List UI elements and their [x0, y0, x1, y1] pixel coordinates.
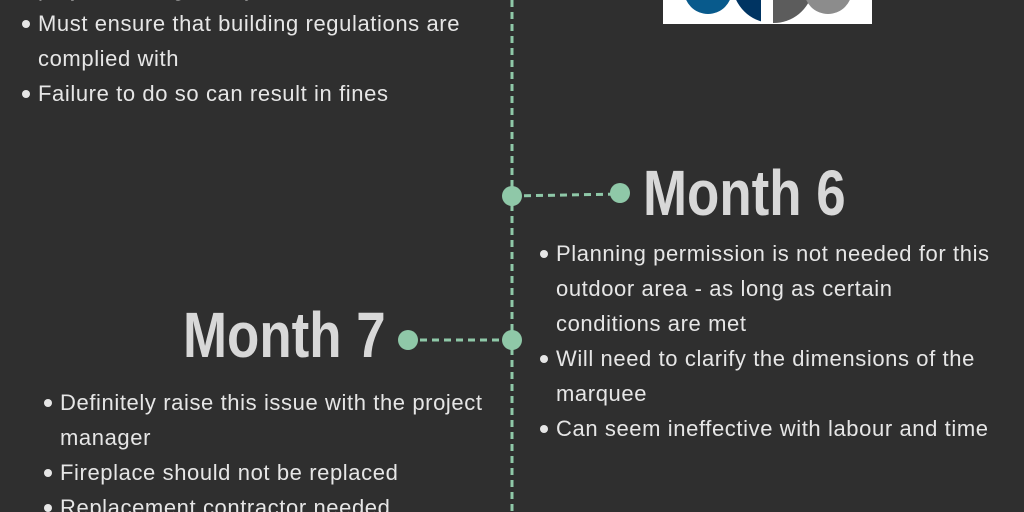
text block: Month 7 bullets: Fireplace should not be replaced — [60, 460, 398, 485]
logo — [663, 0, 872, 24]
text block: Month 6 bullets: Planning permission is not needed for this outdoor area - as long as certain conditions are met — [556, 241, 990, 336]
text block: top-left bullets — [22, 0, 460, 106]
heading: Month 6: Month 6 — [643, 157, 846, 229]
text block: Month 6 bullets: Will need to clarify the dimensions of the marquee — [556, 346, 975, 406]
text block: top-left bullets: Must ensure that building regulations are complied with — [38, 11, 460, 71]
text block: Month 7 bullets — [44, 390, 483, 512]
text block: Month 6 bullets — [540, 241, 990, 441]
heading: Month 7: Month 7 — [183, 299, 386, 371]
text block: top-left bullets: Failure to do so can result in fines — [38, 81, 389, 106]
text block: Month 6 bullets: Can seem ineffective with labour and time — [556, 416, 989, 441]
text block: Month 7 bullets: Definitely raise this issue with the project manager — [60, 390, 483, 450]
